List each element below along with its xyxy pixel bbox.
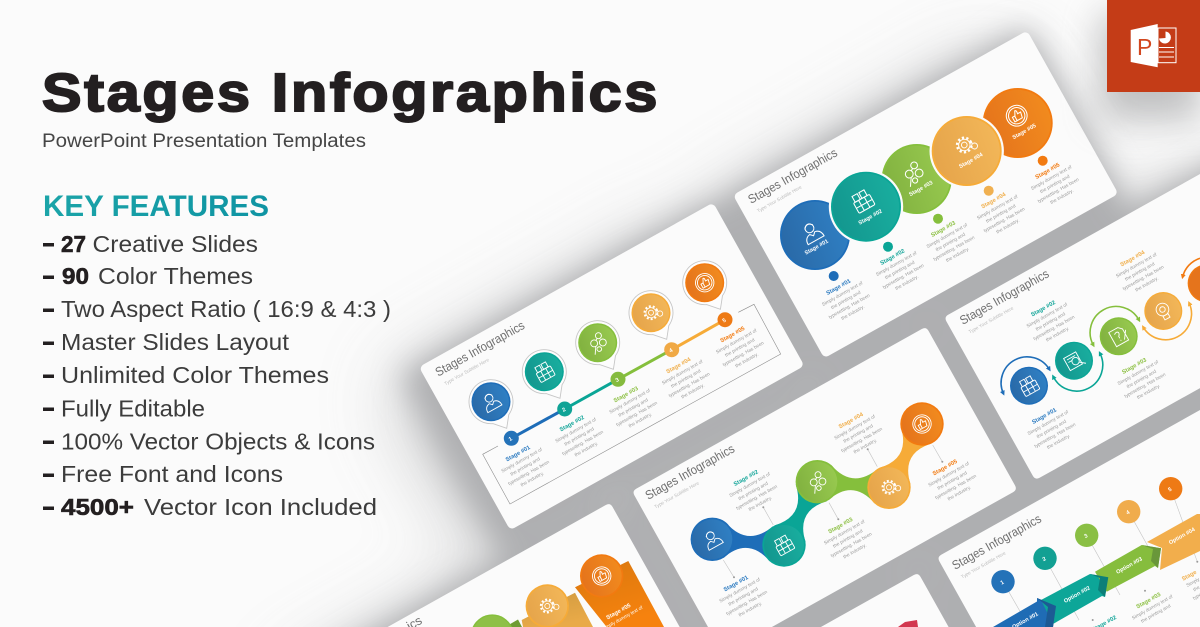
stage descriptions: the industry. [738, 601, 763, 618]
stage circles [1010, 266, 1200, 405]
slide: partial bottom [821, 574, 949, 627]
slide heading: Type Your Subtitle Here [443, 357, 491, 387]
option labels [1011, 527, 1197, 627]
stage descriptions: Simply dummy text of [976, 194, 1020, 221]
stage descriptions: Stage #03 [613, 386, 640, 404]
circle labels: Stage #02 [858, 209, 883, 227]
stage descriptions: Stage #04 [981, 192, 1008, 210]
stage descriptions: Stage #02 [1030, 300, 1057, 318]
leader lines [1003, 489, 1198, 621]
stage descriptions: the industry. [945, 246, 970, 264]
slide: pin timeline [419, 203, 804, 530]
circle labels: Stage #04 [958, 152, 985, 170]
numbered circles: 3 [1083, 533, 1089, 540]
stage descriptions: the printing and [1036, 419, 1068, 440]
stage descriptions: the industry. [628, 412, 653, 429]
stage descriptions: the industry. [842, 543, 868, 560]
step panels [505, 561, 664, 627]
stage descriptions: typesetting. Has been [934, 473, 978, 501]
stage descriptions: Stage #03 [930, 220, 957, 239]
feature list [43, 231, 391, 520]
stage descriptions: the industry. [1134, 276, 1160, 293]
step circles [473, 554, 623, 627]
circle labels: Stage #03 [908, 180, 934, 198]
stage descriptions: the printing and [509, 456, 542, 478]
panel text: Stage #05 [606, 603, 633, 621]
option descriptions: Stage #03 [1136, 592, 1163, 610]
option descriptions [1091, 569, 1200, 627]
stage descriptions: Simply dummy text of [500, 447, 544, 474]
stage descriptions: the industry. [1045, 326, 1070, 343]
stage descriptions: the printing and [727, 586, 760, 608]
slide heading: Type Your Subtitle Here [653, 480, 701, 510]
slide heading: Stages Infographics [950, 512, 1044, 573]
stage descriptions [714, 407, 981, 623]
option labels: Option #04 [1168, 527, 1197, 546]
feature list: Free Font and Icons [61, 461, 283, 487]
stage descriptions: Simply dummy text of [875, 250, 919, 278]
stage descriptions: the printing and [1035, 311, 1067, 333]
stage descriptions: typesetting. Has been [1033, 422, 1077, 450]
stage descriptions: Stage #02 [733, 469, 759, 488]
option descriptions: Stage [1181, 569, 1199, 583]
marker dots [829, 156, 1048, 281]
stage descriptions: Stage #04 [838, 412, 865, 430]
stage descriptions: Simply dummy text of [1117, 359, 1160, 387]
numbered nodes: 1 [508, 436, 514, 443]
badge shadow [1100, 15, 1200, 120]
stage descriptions: typesetting. Has been [830, 531, 873, 559]
stage descriptions: Simply dummy text of [833, 414, 877, 441]
wide soft shadow [288, 53, 1200, 627]
feature list: Vector Icon Included [144, 494, 377, 520]
option labels: Option #02 [1063, 585, 1091, 605]
stage descriptions: the printing and [936, 470, 969, 492]
stage descriptions [817, 158, 1084, 327]
stage descriptions [496, 321, 769, 493]
numbered circles [991, 477, 1182, 593]
slide: stepped panels [388, 504, 680, 627]
numbered circles: 2 [1042, 556, 1047, 563]
stage descriptions: Simply dummy text of [1026, 302, 1069, 329]
stage descriptions: the printing and [724, 337, 756, 359]
stage descriptions: the printing and [985, 203, 1017, 225]
stage descriptions: Simply dummy text of [728, 471, 772, 499]
stage descriptions: the printing and [617, 397, 650, 419]
stage descriptions: Simply dummy text of [715, 328, 759, 355]
leader lines [723, 445, 943, 578]
stage descriptions: the printing and [1124, 261, 1156, 283]
stage descriptions: the printing and [1126, 369, 1158, 390]
stage descriptions: the industry. [734, 352, 760, 369]
stage descriptions: Stage #02 [559, 415, 585, 433]
stage descriptions: the printing and [1039, 174, 1071, 195]
circle icons [799, 102, 1031, 245]
feature list: 4500+ [61, 494, 134, 520]
stage descriptions: the printing and [842, 423, 875, 445]
stage descriptions: the industry. [520, 471, 545, 488]
stage descriptions: Simply dummy text of [718, 577, 762, 604]
stage descriptions: typesetting. Has been [722, 340, 765, 368]
front stage circles [829, 114, 1004, 244]
stage descriptions: Stage #05 [720, 326, 747, 344]
back stage circles [780, 88, 1053, 270]
subtitle: PowerPoint Presentation Templates [42, 131, 366, 152]
timeline connectors [511, 320, 725, 438]
feature list: Color Themes [98, 263, 253, 289]
stage descriptions: Simply dummy text of [661, 359, 705, 386]
stage descriptions: typesetting. Has been [882, 263, 925, 291]
stage descriptions: the printing and [563, 426, 596, 448]
stage descriptions: the industry. [1046, 433, 1071, 451]
stage descriptions: the industry. [680, 383, 706, 400]
slide heading: Type Your Subtitle Here [756, 184, 803, 214]
feature list: Master Slides Layout [61, 329, 290, 355]
stage descriptions: the printing and [935, 232, 967, 253]
arrow band [993, 514, 1200, 627]
stage descriptions: Stage #01 [826, 278, 853, 297]
stage descriptions: Simply dummy text of [554, 417, 598, 444]
blob necks [723, 427, 932, 562]
stage descriptions: typesetting. Has been [561, 429, 605, 457]
stage descriptions: the industry. [853, 438, 878, 455]
stage descriptions: the printing and [670, 368, 702, 390]
stage descriptions: Stage #01 [505, 445, 532, 463]
stage descriptions: Stage #04 [666, 357, 693, 375]
slide heading: Type Your Subtitle Here [960, 550, 1007, 580]
numbered nodes: 4 [668, 347, 675, 355]
option labels: Option #03 [1115, 556, 1144, 576]
stage descriptions: Stage #03 [1121, 357, 1148, 376]
feature list: Unlimited Color Themes [61, 362, 329, 388]
map pins [469, 261, 727, 428]
feature list: 27 [61, 231, 86, 257]
feature list: Creative Slides [92, 231, 258, 257]
stage descriptions: typesetting. Has been [1037, 177, 1080, 205]
stage descriptions: Simply dummy text of [926, 222, 969, 250]
circle labels: Stage #01 [804, 239, 830, 257]
stage descriptions: Stage #01 [1031, 407, 1058, 426]
numbered circles: 1 [1000, 580, 1005, 587]
slide heading: Stages Infographics [643, 442, 737, 503]
slide heading: Stages Infographics [746, 146, 840, 207]
stage descriptions: the printing and [884, 260, 916, 281]
curved arrows [1001, 258, 1200, 393]
PowerPoint badge [1107, 0, 1200, 92]
stage descriptions: typesetting. Has been [735, 484, 779, 512]
stage descriptions: Simply dummy text of [608, 388, 652, 415]
stage descriptions: the industry. [748, 495, 773, 513]
stage descriptions: the industry. [995, 218, 1021, 235]
stage descriptions: Stage #03 [828, 517, 855, 535]
stage descriptions: typesetting. Has been [828, 293, 871, 321]
icon: PowerPoint logo: P [1137, 34, 1152, 60]
option descriptions: the printing and [1140, 603, 1172, 625]
stage descriptions: the industry. [574, 441, 599, 458]
feature list: Two Aspect Ratio ( 16:9 & 4:3 ) [61, 296, 391, 322]
stage descriptions: the printing and [832, 528, 864, 550]
stage descriptions: Simply dummy text of [1030, 164, 1074, 192]
stage descriptions: Simply dummy text of [1115, 252, 1159, 279]
numbered nodes: 3 [615, 377, 620, 384]
stage descriptions: Simply dummy text of [823, 519, 867, 546]
stage descriptions: typesetting. Has been [840, 426, 884, 454]
red shape [898, 620, 918, 627]
slide heading: Stages Infographics [957, 267, 1051, 328]
numbered circles: 4 [1125, 509, 1132, 517]
stage descriptions: the industry. [894, 274, 920, 292]
stage descriptions: Stage #01 [723, 575, 750, 593]
key features heading: KEY FEATURES [43, 190, 269, 223]
slide heading: Type Your Subtitle Here [968, 305, 1015, 335]
slide: connected blobs [634, 328, 1016, 627]
stage descriptions: the industry. [947, 485, 972, 502]
stage descriptions: typesetting. Has been [1123, 372, 1167, 400]
option descriptions: Simply dummy text of [1131, 594, 1175, 621]
feature list: 90 [62, 263, 89, 289]
stage descriptions: the industry. [840, 304, 866, 322]
slide: option arrows [939, 410, 1200, 627]
stage descriptions: Stage #02 [880, 248, 906, 267]
panel text [597, 598, 645, 627]
stage descriptions: typesetting. Has been [507, 459, 551, 487]
main title: Stages Infographics [42, 63, 660, 123]
stage descriptions: the printing and [737, 481, 770, 502]
feature list: Fully Editable [61, 396, 205, 422]
stage descriptions: typesetting. Has been [668, 371, 711, 399]
blob circles [691, 402, 944, 567]
stage descriptions: typesetting. Has been [615, 400, 659, 428]
stage descriptions: Stage #05 [932, 459, 959, 477]
slide shadows [312, 43, 1200, 627]
frame arrow [483, 304, 781, 504]
stage descriptions: Simply dummy text of [927, 461, 971, 488]
stage descriptions [1022, 245, 1171, 456]
numbered nodes: 2 [561, 407, 567, 414]
stage descriptions: typesetting. Has been [1122, 264, 1165, 292]
stage descriptions: typesetting. Has been [725, 589, 769, 617]
circle labels: Stage #05 [1012, 123, 1037, 141]
slide: circular arrows [946, 174, 1200, 479]
stage descriptions: Simply dummy text of [821, 280, 865, 308]
stage descriptions: Simply dummy text of [1027, 409, 1070, 437]
stage descriptions: Stage #04 [1120, 250, 1147, 268]
stage descriptions: typesetting. Has been [983, 206, 1026, 234]
stage descriptions: typesetting. Has been [1032, 314, 1076, 342]
stage descriptions: the industry. [1049, 188, 1075, 206]
feature list: 100% Vector Objects & Icons [61, 428, 375, 454]
slide heading: Stages Infographics [433, 318, 527, 379]
stage descriptions: the printing and [830, 290, 862, 311]
slide: overlapping stage circles [733, 31, 1118, 358]
stage descriptions: typesetting. Has been [932, 235, 976, 263]
numbered nodes: 5 [722, 318, 727, 325]
stage descriptions: the industry. [1136, 383, 1161, 401]
numbered circles: 5 [1167, 487, 1173, 494]
stage descriptions: Stage #05 [1035, 162, 1062, 181]
numbered nodes [504, 312, 732, 446]
circle labels [804, 123, 1037, 257]
